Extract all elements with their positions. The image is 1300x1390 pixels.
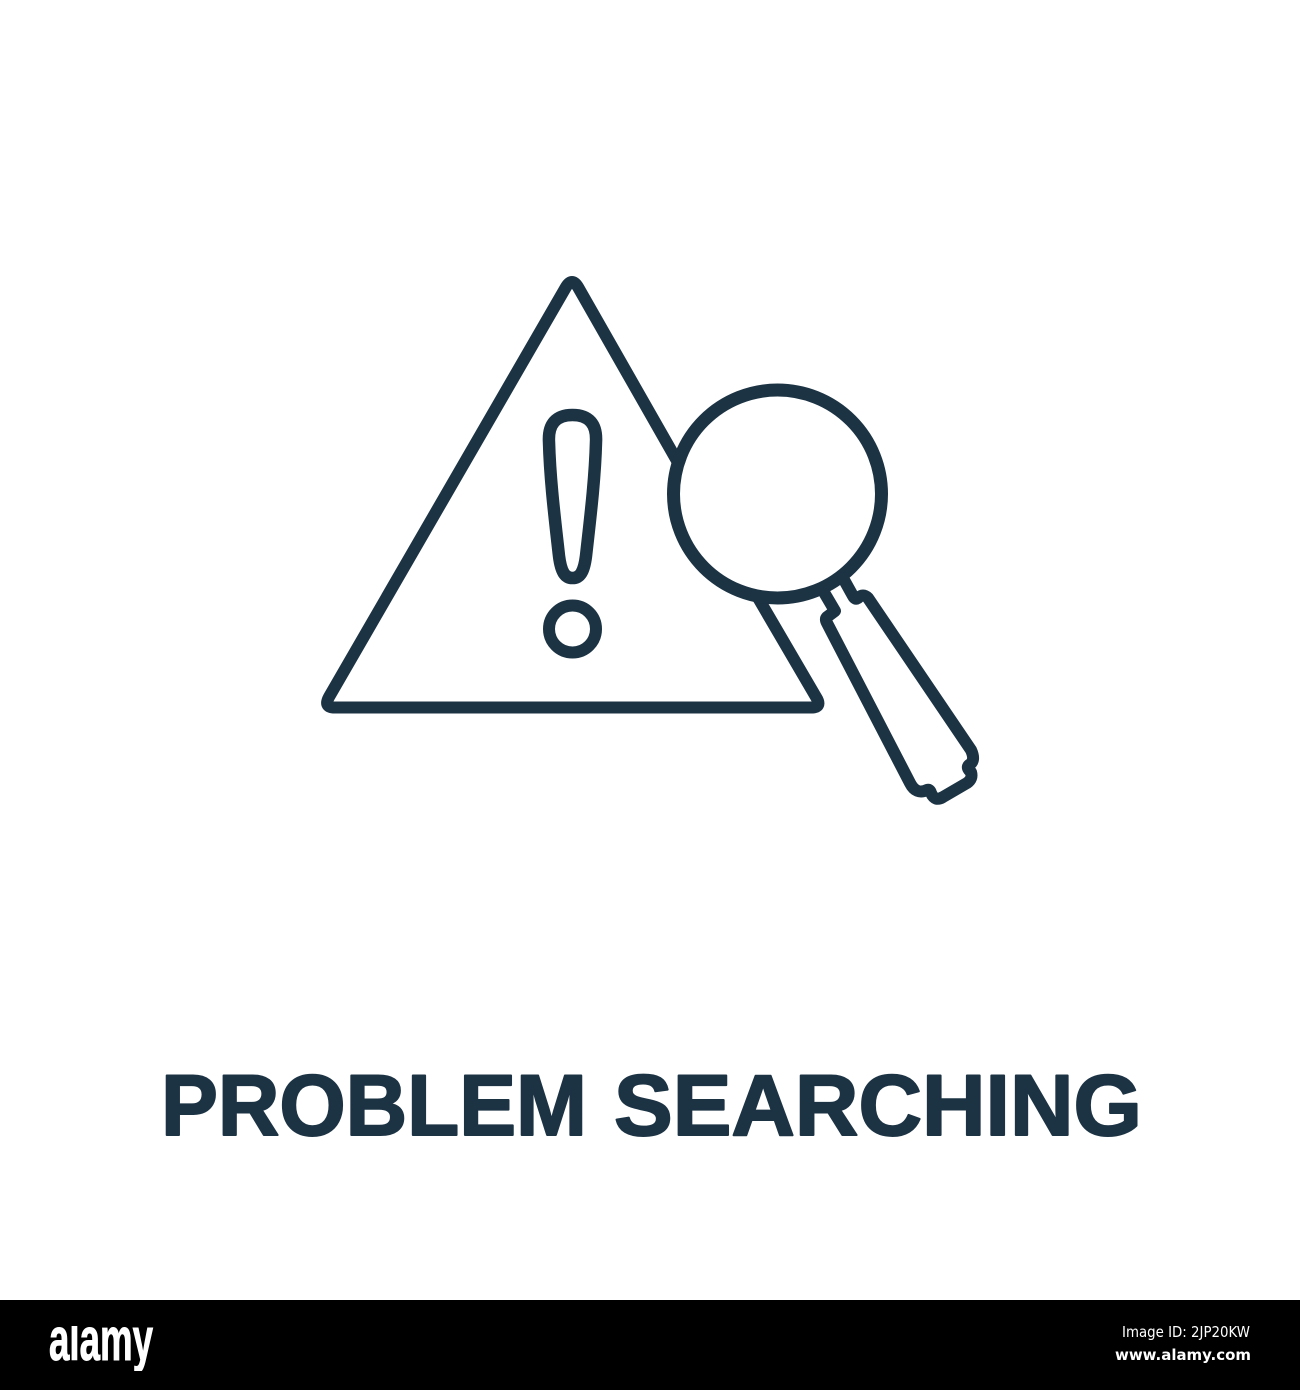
title: PROBLEM SEARCHING: PROBLEM (161, 1058, 587, 1154)
footer image id: Image ID: 2JP20KW (1122, 1323, 1250, 1341)
icon: exclamation mark dot (549, 606, 596, 652)
icon: exclamation mark stem (549, 415, 596, 578)
icon: warning triangle outline (327, 282, 818, 708)
icon: warning triangle with magnifier (327, 282, 973, 799)
icon: magnifier handle (825, 578, 973, 799)
footer bar (0, 1300, 1300, 1390)
footer logo: alamy: alamy (49, 1306, 153, 1373)
title: PROBLEM SEARCHING: SEARCHING (614, 1058, 1142, 1154)
footer website: www.alamy.com (1115, 1346, 1251, 1364)
icon: magnifier lens (674, 390, 882, 598)
title: PROBLEM SEARCHING (161, 1058, 1142, 1154)
